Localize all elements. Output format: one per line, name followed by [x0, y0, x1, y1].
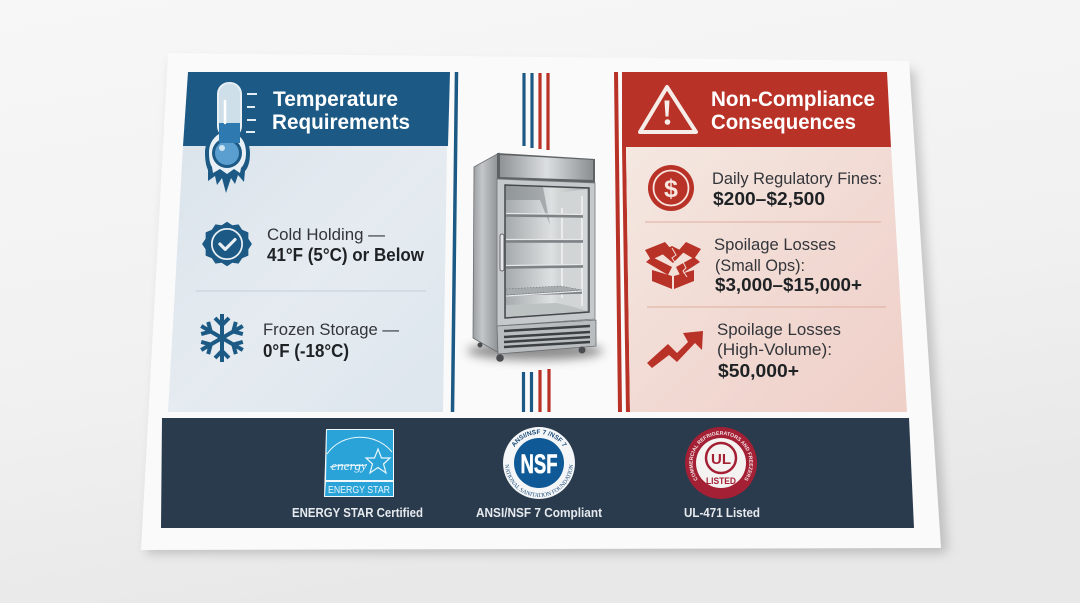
cold holding text: Cold Holding —: [267, 225, 385, 244]
badge: NSF: [503, 427, 575, 499]
icon: damaged box: [645, 242, 701, 289]
door handle: [500, 234, 504, 271]
heading: Temperature: [273, 88, 398, 111]
frozen storage text: Frozen Storage —: [263, 320, 399, 339]
badge: UL listed: [685, 427, 757, 499]
label: NSF: ANSI/NSF 7 Compliant: [476, 506, 603, 520]
label: UL: UL-471 Listed: [684, 506, 760, 520]
commercial glass door refrigerator: [467, 153, 603, 362]
daily fines text: $200–$2,500: [713, 189, 825, 209]
center stripes top: [524, 73, 548, 150]
paper sheet: [141, 53, 948, 554]
daily fines text: Daily Regulatory Fines:: [712, 169, 882, 188]
badge: UL listed: UL: [711, 451, 731, 468]
spoilage high volume text: (High-Volume):: [717, 340, 832, 359]
icon: frozen thermometer: [205, 82, 257, 193]
header band: [183, 72, 450, 146]
icon: warning triangle: [640, 87, 696, 132]
icon: dollar coin: [648, 165, 694, 211]
frozen storage text: 0°F (-18°C): [263, 341, 349, 361]
panel body: [168, 146, 447, 412]
shelves: [506, 215, 583, 294]
footer certification band: [161, 418, 914, 528]
red vertical rules: [614, 72, 630, 412]
vent grille: [497, 320, 596, 354]
spoilage small ops text: (Small Ops):: [715, 256, 805, 275]
badge: UL listed: COMMERCIAL REFRIGERATORS AND FREEZERS: [689, 431, 753, 481]
badge: UL listed: LISTED: [706, 476, 736, 487]
door frame: [497, 179, 595, 326]
cold holding text: [267, 225, 425, 265]
badge: NSF: ANSI/NSF 7 /NSF 7: [512, 430, 567, 448]
heading: [711, 88, 875, 134]
icon: rising arrow: [647, 331, 703, 368]
cold holding text: 41°F (5°C) or Below: [267, 245, 425, 265]
badge: energy star: [324, 429, 394, 497]
heading: [272, 88, 410, 134]
panel body: [626, 147, 907, 412]
badge: energy star: ENERGY STAR: [328, 484, 390, 496]
center stripes bottom: [524, 369, 549, 412]
daily fines text: [712, 169, 882, 209]
heading: Requirements: [272, 111, 410, 134]
spoilage high volume text: $50,000+: [718, 361, 799, 381]
top header: [497, 153, 595, 183]
casters: [478, 342, 586, 362]
spoilage small ops text: Spoilage Losses: [714, 235, 836, 254]
side panel: [473, 153, 499, 353]
header band: [622, 72, 891, 147]
badge: NSF: NSF: [520, 449, 558, 479]
frozen storage text: [263, 320, 399, 361]
badge: energy star: energy: [331, 458, 367, 473]
icon: checkmark badge: [202, 222, 252, 266]
spoilage small ops text: [714, 235, 862, 295]
glass interior: [505, 185, 589, 318]
blue vertical rule: [452, 72, 456, 412]
heading: Non-Compliance: [711, 88, 875, 111]
panel: non-compliance consequences: [622, 72, 907, 412]
badge: NSF: NATIONAL SANITATION FOUNDATION: [505, 464, 573, 498]
spoilage high volume text: Spoilage Losses: [717, 320, 841, 339]
icon: snowflake: [198, 314, 246, 362]
spoilage high volume text: [717, 320, 841, 381]
panel: temperature requirements: [168, 72, 450, 412]
icon: dollar coin: $: [664, 175, 678, 203]
label: energy star: ENERGY STAR Certified: [292, 506, 423, 520]
heading: Consequences: [711, 111, 856, 134]
spoilage small ops text: $3,000–$15,000+: [715, 275, 862, 295]
